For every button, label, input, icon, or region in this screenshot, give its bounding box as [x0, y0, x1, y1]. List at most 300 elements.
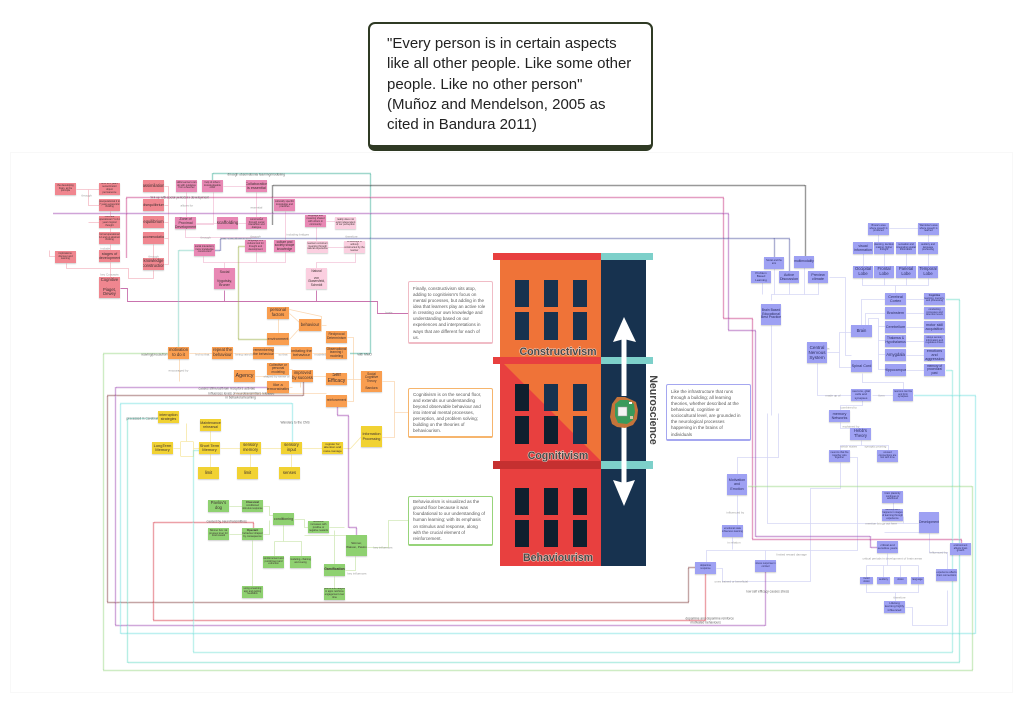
note: brain	[851, 325, 872, 337]
note: cortex function: learning, memory, and processing	[925, 297, 944, 302]
roof and floor bars, teal side	[601, 253, 653, 469]
text block: neuroscience explanation: through a building; all learning	[671, 395, 731, 400]
note: implications: implications: discover and learning	[58, 252, 73, 260]
note: synapses: neurons can fire and form synapses	[894, 390, 912, 398]
connector labels: shaped by sense of	[264, 374, 290, 378]
connector labels: leaving/precaution	[142, 352, 168, 356]
quote box	[368, 22, 653, 151]
note: thorndike: Skinner box: rat presses lever for food reward	[209, 529, 228, 537]
note: natural learning: learners construct meaning through natural experience	[307, 242, 328, 250]
connector labels: influences levels of neurotransmitters released	[208, 392, 274, 396]
note: social cognitive theory: Social Cognitive Theory	[365, 372, 378, 383]
text block: cognitivism explanation: into internal mental processes,	[413, 410, 474, 415]
neuroscience column	[601, 260, 646, 566]
note: modeling: modeling, chaining and cueing	[290, 558, 311, 564]
note: problem-based learning	[751, 271, 771, 283]
note: memory networks: memory Networks	[832, 412, 847, 420]
note: parietal lobe	[896, 266, 916, 278]
note: social practice: Social and the arts	[766, 259, 782, 265]
note: interruption strategies: interruption strategies	[160, 413, 177, 421]
note: natural constructivism: Schmidt	[311, 283, 322, 287]
dotted link: observational learning	[212, 174, 370, 354]
connector labels: critical periods in development of brain areas	[862, 556, 923, 560]
text block: behaviourism explanation: reinforcement.	[413, 536, 442, 541]
note: reciprocal determinism	[326, 331, 347, 343]
text block: neuroscience explanation: the neurological processes	[671, 419, 725, 424]
text block: cognitivism explanation: Cognitivism is on the second floor,	[413, 392, 481, 396]
arrow: up	[613, 317, 636, 396]
note: stages of development	[99, 250, 120, 262]
note: classical	[242, 500, 263, 512]
note: environment	[267, 333, 289, 345]
note: memory networks	[829, 410, 850, 422]
text block: behaviourism explanation: ground floor because it was	[413, 505, 468, 510]
note: personal factors: personal factors	[270, 307, 286, 317]
note: occipital lobe	[853, 266, 873, 278]
quote box: "Every person is in certain aspects	[387, 35, 617, 52]
note: auditory	[877, 577, 890, 584]
note: maintenance rehearsal	[200, 419, 221, 431]
note: pavlov's dog	[208, 500, 229, 512]
connector labels: including bridges	[286, 232, 310, 236]
neuroscience sticky notes: purple cluster	[694, 223, 972, 614]
label: behaviourism: Behaviourism	[523, 552, 593, 564]
note: development	[919, 512, 939, 533]
note: motivation and emotion	[727, 474, 747, 495]
connector labels: key influences	[374, 546, 393, 550]
note: neurons: neurons, glial cells and synapses	[852, 389, 870, 400]
note: stress response: stress response in cortisol	[755, 562, 776, 568]
note: amygdala	[885, 349, 906, 361]
constructivism sticky notes: red cluster	[54, 180, 164, 300]
connector labels: ones trained or beneficial	[714, 580, 748, 584]
note: sensory input: sensory input	[284, 442, 299, 452]
note: occipital lobe: Occipital Lobe	[855, 266, 871, 276]
note: senses	[279, 467, 300, 479]
note: conditioning: conditioning	[274, 517, 293, 521]
connector labels: through	[148, 254, 159, 258]
note: social constructivism	[214, 268, 235, 289]
note: reinforcement types	[263, 556, 284, 568]
note: best practice	[761, 304, 781, 325]
text block: neuroscience explanation: behavioural, cognitive or	[671, 407, 720, 412]
label: neuroscience: Neuroscience	[647, 375, 659, 445]
note: dopamine: dopamine response	[700, 564, 711, 570]
note: cerebellum	[885, 321, 906, 333]
connector labels: caused by neurotransmitters	[206, 520, 247, 524]
note: sensory memory: sensory memory	[243, 442, 258, 452]
note: culturally specific	[274, 199, 295, 211]
note: motor	[860, 577, 873, 584]
note: scaffolding	[217, 217, 238, 229]
note: stress level: emotional state influences learning	[722, 527, 743, 533]
connector labels: motivated behaviours	[690, 620, 721, 624]
note: equilibrium: equilibrium	[143, 219, 164, 224]
note: agency	[234, 370, 255, 382]
note: cerebral cortex	[885, 293, 906, 305]
dotted link: green	[104, 354, 972, 670]
connector labels: brain describes modern	[220, 236, 252, 240]
note: reciprocal determinism: Reciprocal Determinism	[327, 332, 346, 340]
note: pruning statement	[877, 450, 898, 462]
connector labels: in relation	[728, 540, 741, 544]
note: temporal function: auditory and language processing	[921, 243, 935, 251]
note: cognitive theory: Dewey	[103, 291, 116, 296]
note: operant	[242, 528, 263, 540]
connector labels: influenced by	[726, 510, 745, 514]
note: plasticity: brain plasticity continues in adulthood	[885, 492, 900, 500]
note: temporal lobe: Temporal Lobe	[919, 266, 937, 276]
note: frontal lobe	[874, 266, 894, 278]
note: spinal cord: Spinal Cord	[852, 364, 871, 368]
note: thalamus hypothalamus: Thalamus & Hypothalamus	[885, 336, 906, 344]
note: hebb statement: neurons that fire together wire together	[830, 451, 849, 459]
note: social cognitive theory: Bandura	[365, 386, 378, 390]
dotted link: cyan interruption	[128, 300, 960, 662]
note: preview climate	[808, 271, 828, 283]
windows: cognitivism floor	[515, 384, 587, 444]
note: operant example	[242, 586, 263, 598]
note: assimilation	[143, 180, 164, 192]
note: social interaction	[194, 244, 215, 256]
note: brain: Brain	[857, 328, 866, 333]
note: behaviour	[299, 319, 321, 331]
note: experience influence	[936, 569, 957, 581]
pale connectors: green cluster	[230, 506, 408, 588]
note: environment: environment	[268, 337, 288, 341]
label: constructivism: Constructivism	[519, 346, 597, 358]
arrow: down	[613, 426, 635, 506]
note: multimodality: multimodality	[794, 259, 814, 263]
note: reinforcement types: reinforcement and punishment and extinction	[263, 557, 284, 565]
quote box: (Muñoz and Mendelson, 2005 as	[387, 96, 605, 113]
note: operant: Operant	[247, 528, 258, 532]
text block: constructivism explanation	[408, 281, 493, 344]
social cognitive sticky notes: orange cluster	[168, 307, 382, 408]
note: lightly shared	[335, 217, 356, 229]
text block: cognitivism explanation: beyond observable behaviour and	[413, 404, 481, 409]
note: social constructivism: Bruner	[219, 283, 230, 287]
note: natural constructivism	[306, 268, 327, 289]
dotted link: black to multimodality	[272, 186, 806, 256]
note: thalamus function	[924, 335, 945, 347]
note: auditory: auditory	[879, 578, 888, 581]
note: information processing	[361, 426, 382, 447]
note: early learning: Lifelong learning highly influenced	[885, 601, 904, 612]
note: parietal lobe: Parietal Lobe	[899, 266, 913, 276]
connector labels: key influences	[348, 572, 367, 576]
connector labels: combined to	[840, 406, 857, 410]
windows: constructivism floor	[515, 280, 587, 340]
note: register for attention: register for attention and meta-manage	[323, 442, 342, 453]
text block: behaviourism explanation: with the crucial element of	[413, 530, 465, 535]
note: procedural memory	[924, 364, 945, 376]
windows: behaviourism floor	[515, 488, 587, 547]
note: collaboration	[246, 180, 267, 192]
note: developing brain	[55, 183, 76, 195]
connector labels: made up of	[826, 394, 841, 398]
note: classical: Classical	[246, 500, 259, 504]
note: experience influence: experience affects brain connections	[936, 571, 957, 577]
note: improved by success: improved by success	[292, 370, 313, 380]
note: brain area top left	[868, 223, 889, 235]
note: natural constructivism: Natural	[311, 269, 322, 273]
dotted link: red	[154, 522, 706, 620]
note: social practice	[764, 257, 784, 269]
text block: neuroscience explanation: Like the infrastructure that runs	[671, 388, 733, 394]
text block: constructivism explanation: ways that are different for each of	[413, 329, 480, 334]
text block: neuroscience explanation: sociocultural level, are grounded in	[671, 413, 741, 418]
note: limit 2: limit	[244, 470, 251, 475]
dotted link: cyan short term memory	[194, 370, 952, 652]
note: lightly shared: reality does not exist independent of our perception	[336, 218, 355, 226]
note: social constructivism: Social	[220, 270, 229, 274]
note: cerebellum: Cerebellum	[886, 325, 905, 329]
note: vision	[894, 577, 907, 584]
connector labels: which states	[840, 444, 858, 448]
note: brainstem function: conducting processes and attention levels	[926, 308, 943, 316]
note: hebb's theory	[850, 428, 871, 440]
note: best practice: Brain Based Educational Best Practice	[761, 308, 781, 319]
text block: constructivism explanation: us.	[413, 335, 419, 340]
connector labels: through	[200, 236, 211, 240]
text block: neuroscience explanation: happening in the brains of	[671, 425, 723, 430]
note: implications	[55, 251, 76, 263]
note: hippocampus	[885, 364, 906, 376]
note: pavlov's dog: Pavlov's dog	[211, 500, 226, 510]
connector labels: Wanders to the CNS	[280, 420, 310, 424]
connector labels: link up with social periods in development	[150, 196, 209, 200]
note: cortex function: Cognitive	[929, 294, 940, 297]
note: limit 2	[237, 467, 258, 479]
connector labels: form	[878, 394, 885, 398]
note: brainstem: Brainstem	[887, 311, 904, 315]
note: information processing: Information Processing	[362, 432, 380, 440]
dotted link: teal to motivation	[178, 250, 194, 348]
pale connectors: orange cluster	[180, 310, 408, 438]
note: gamification	[324, 564, 345, 576]
dotted link: magenta	[126, 198, 962, 544]
pale connectors: neuroscience cluster	[706, 228, 948, 626]
text block: cognitivism explanation: behaviourism.	[413, 428, 441, 433]
connector labels: causes stimulus/brain receptors activate	[198, 386, 255, 390]
note: accommodation	[143, 232, 164, 244]
text block: constructivism explanation: Finally, constructivism sits atop,	[413, 286, 476, 290]
note: environment influence	[950, 543, 971, 555]
text block: constructivism explanation: adding to cognitivism's focus on	[413, 292, 476, 297]
connector labels: therefore	[346, 234, 358, 238]
dotted link: brown	[108, 382, 696, 602]
note: social cognitive theory	[361, 371, 382, 392]
note: central nervous system	[807, 342, 827, 363]
note: reinforcement: reinforcement	[327, 398, 346, 402]
text block: behaviourism explanation: Behaviourism is visualized as the	[413, 499, 479, 504]
note: frontal lobe: Frontal Lobe	[877, 266, 891, 276]
note: brain area top right	[918, 223, 939, 235]
note: help of others: help of others: knowledgeable other	[204, 181, 221, 189]
text block: behaviourism explanation: foundational to our understanding of	[413, 511, 485, 516]
quote box: people. Like no other person"	[387, 76, 582, 93]
note: language	[911, 577, 924, 584]
dotted link: cyan sensory input	[120, 396, 976, 634]
note: cerebral cortex: Cerebral Cortex	[888, 295, 903, 303]
note: sensory input	[281, 442, 302, 454]
note: limit 1: limit	[205, 470, 212, 475]
connector labels: through observational learning/modelling	[228, 172, 285, 176]
note: conditioning	[273, 513, 294, 525]
constructivism sticky notes: pink cluster	[174, 180, 366, 290]
note: behaviour: behaviour	[301, 322, 319, 327]
connector labels: Influenced by	[930, 550, 948, 554]
note: development: Development	[919, 520, 939, 524]
note: developing brain: the developing brain, at the principle	[57, 184, 74, 192]
note: multimodality	[794, 256, 814, 268]
note: environment influence: environment affects brain growth	[954, 544, 967, 552]
note: modeling	[290, 556, 311, 568]
connector labels: key Concepts	[100, 272, 119, 276]
note: reinforcement	[326, 395, 347, 407]
quote box: cited in Bandura 2011)	[387, 116, 537, 133]
solid magenta link to constructivism text	[120, 288, 408, 314]
note: cognitive theory: Cognitive	[101, 277, 118, 282]
note: long term memory	[152, 442, 173, 454]
pale connectors: yellow cluster	[174, 424, 362, 468]
note: interruption strategies	[158, 411, 179, 423]
note: operant example: using a learning app and getting feedback	[244, 587, 261, 595]
connector labels: through	[82, 194, 92, 198]
text block: cognitivism explanation: perception, and problem solving;	[413, 416, 478, 421]
text block: constructivism explanation: idea that learners play an active role	[413, 304, 485, 309]
text block: behaviourism explanation	[408, 496, 493, 546]
note: problem-based learning: Problem Based Learning	[755, 271, 767, 282]
note: social interaction: social interaction; more knowledge construction	[195, 245, 214, 253]
connector labels: essential	[250, 206, 263, 210]
dotted link: violet	[116, 388, 766, 626]
note: parietal function: sensation and integrating spatial information	[896, 243, 916, 251]
note: imitating	[291, 347, 312, 359]
connector labels: limited reward damage	[776, 552, 807, 556]
connector labels: synaptic pruning	[864, 444, 887, 448]
note: central nervous system: Central Nervous System	[808, 345, 826, 360]
note: stress response	[755, 560, 776, 572]
note: agency: Agency	[236, 373, 253, 379]
note: preoperational: preoperational 2 to 7 years egocentric thinking	[99, 200, 120, 208]
note: thalamus function: relays sensory information and regulates drives	[926, 336, 943, 344]
connector labels: in behavioral learning	[226, 396, 256, 400]
note: synapses	[893, 389, 913, 401]
note: brainstem	[885, 307, 906, 319]
note: pruning statement: unused connections are lost with time	[879, 451, 896, 459]
note: senses: senses	[283, 470, 296, 475]
note: limit 1	[198, 467, 219, 479]
text block: constructivism explanation: understanding based on our	[413, 316, 469, 321]
text block: constructivism explanation: in creating our own knowledge and	[413, 310, 483, 315]
floor: cognitivism	[500, 364, 601, 461]
note: hebb's theory: Hebb's Theory	[854, 428, 867, 438]
note: formal operational: formal operational 12 and up abstract thinking	[99, 233, 120, 241]
icon: brain chip	[610, 397, 638, 428]
connector labels: low self efficacy causes stress	[746, 590, 790, 594]
note: skill learner	[176, 180, 197, 192]
note: critical periods	[877, 541, 898, 553]
connector labels: processed in Cerebral Cortex	[126, 416, 168, 420]
note: maintenance rehearsal: Maintenance rehearsal	[200, 421, 221, 429]
note: classical: conditioned stimulus response	[242, 504, 263, 510]
note: brain area top left: Broca's area where speech is produced	[869, 224, 888, 232]
note: temporal function	[918, 242, 938, 254]
text block: behaviourism explanation: on stimulus and response, along	[413, 524, 478, 529]
connector labels: mention brings out here	[866, 522, 897, 526]
connector labels	[82, 172, 948, 624]
note: skinner	[346, 535, 367, 556]
note: equilibrium	[143, 216, 164, 228]
text block: neuroscience explanation	[666, 384, 751, 441]
connector labels: include	[100, 246, 110, 250]
dotted link: navy	[194, 238, 790, 272]
dotted link: olive	[238, 246, 268, 340]
note: preview climate: Preview climate	[811, 273, 825, 281]
text block: cognitivism explanation: and extends our understanding	[413, 398, 475, 403]
roof and floor bars, red side	[493, 253, 601, 469]
cognitivism sticky notes: yellow cluster	[152, 411, 382, 480]
note: motor skill acquisition	[924, 321, 945, 333]
text block: constructivism explanation: experiences and interpretations in	[413, 322, 481, 327]
note: remembering: remembering the behaviour	[253, 348, 274, 356]
note: operant: behaviour shaped by consequence	[243, 532, 262, 538]
connector labels: so that	[278, 352, 288, 356]
text block: neuroscience explanation: theories, whether described at the	[671, 401, 739, 406]
note: gamification: Gamification	[324, 567, 345, 571]
pale connectors: pink cluster	[186, 186, 356, 268]
connector labels: led so that	[196, 352, 210, 356]
text block: neuroscience explanation: individuals	[671, 432, 692, 437]
connector labels: allows for	[180, 204, 193, 208]
text block: constructivism explanation: mental processes, but adding in the	[413, 298, 484, 303]
text block: behaviourism explanation: human learning; with its emphasis	[413, 517, 481, 522]
note: dopamine	[695, 562, 716, 574]
connector labels: being rated by	[236, 352, 255, 356]
note: zone of proximal development: Zone of Proximal Development	[175, 217, 196, 229]
note: sensory memory	[240, 442, 261, 454]
note: thalamus hypothalamus	[885, 335, 906, 347]
note: long term memory: LongTerm Memory	[154, 443, 171, 452]
floor: constructivism	[500, 260, 601, 357]
note: help of others	[202, 180, 223, 192]
note: natural constructivism: von Glasersfeld,	[308, 276, 325, 283]
note: imitating: imitating the behaviour	[291, 349, 312, 357]
connector labels: basis	[386, 310, 393, 314]
note: brainstem function	[924, 307, 945, 319]
pale connectors: red cluster	[50, 186, 168, 278]
note: plasticity	[882, 491, 903, 503]
note: critical periods: critical and sensitive years	[878, 543, 897, 550]
dotted link: reinforcement to skinner	[338, 408, 356, 536]
note: amygdala: Amygdala	[886, 352, 905, 357]
note: repeat: repeat the behaviour	[213, 347, 232, 357]
note: cognitive theory: Piaget,	[103, 286, 116, 292]
note: disequilibrium	[143, 199, 164, 211]
note: spinal cord	[851, 360, 872, 372]
connector labels: with MMO	[358, 352, 372, 356]
note: thorndike	[208, 528, 229, 540]
connector labels: dopamine and dopamine reinforce	[686, 616, 734, 620]
connector labels: modeled	[314, 352, 326, 356]
note: short term memory: Short Term Memory	[200, 443, 219, 452]
dotted link: purple	[54, 214, 878, 548]
note: visual information: visual information	[854, 244, 872, 252]
note: temporal lobe	[918, 266, 938, 278]
note: culturally specific: culturally specific knowledge and practices	[275, 200, 294, 208]
